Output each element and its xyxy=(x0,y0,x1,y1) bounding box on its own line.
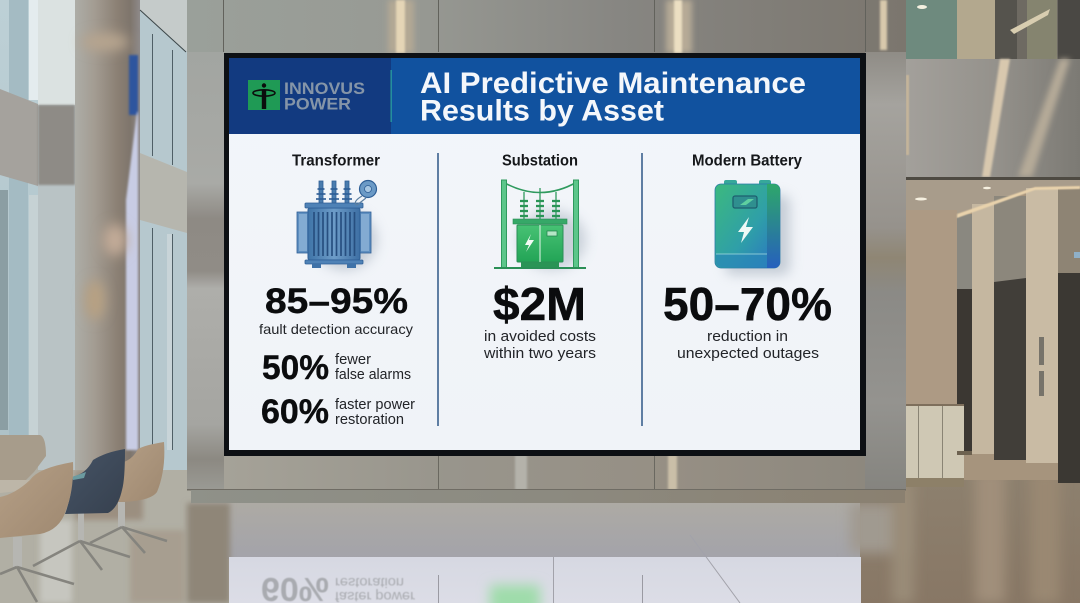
text: reduction in unexpected outages: reduction in xyxy=(707,329,788,345)
icon: substation xyxy=(494,180,586,270)
ceiling and elevators xyxy=(906,180,1080,487)
chair: navy xyxy=(33,449,130,570)
heading: Transformer: Transformer xyxy=(292,153,380,170)
title: Results by Asset xyxy=(420,94,664,128)
column divider left xyxy=(437,153,439,426)
stat: 60% faster power restoration: faster power xyxy=(335,397,415,413)
metal column xyxy=(75,0,140,470)
chair: rear tan xyxy=(90,442,167,553)
lounge chairs xyxy=(0,435,167,602)
stat: 50% fewer false alarms: fewer xyxy=(335,352,371,368)
heading: Substation: Substation xyxy=(502,153,578,170)
metal wall side pillars xyxy=(187,52,224,490)
logo wordmark: INNOVUS xyxy=(284,80,365,98)
logo wordmark: POWER xyxy=(284,95,351,113)
floor reflection of screen xyxy=(261,535,740,603)
stat: $2M: $2M xyxy=(493,278,586,330)
digital screen xyxy=(224,53,866,456)
text: in avoided costs within two years: in avoided costs xyxy=(484,329,596,345)
floor reflection of screen: restoration xyxy=(335,575,404,591)
column divider right xyxy=(641,153,643,426)
header divider xyxy=(390,70,392,122)
right-of-column windows xyxy=(140,0,187,470)
metal wall top xyxy=(187,0,906,53)
icon: transformer xyxy=(297,180,377,270)
stat: 50% fewer false alarms: false alarms xyxy=(335,367,411,383)
title xyxy=(420,67,806,128)
text: in avoided costs within two years xyxy=(483,329,596,362)
stat: 50% fewer false alarms xyxy=(262,349,411,387)
chair: front tan xyxy=(0,462,74,602)
text: in avoided costs within two years: within two years xyxy=(483,346,596,362)
title: AI Predictive Maintenance xyxy=(420,67,806,100)
text: reduction in unexpected outages: unexpected outages xyxy=(677,346,819,362)
logo wordmark xyxy=(284,80,365,113)
floor xyxy=(0,455,1080,603)
screen background xyxy=(229,58,860,450)
left column pale xyxy=(38,0,75,470)
logo icon xyxy=(248,80,280,110)
right upper glass xyxy=(906,0,1080,60)
panel: transformer xyxy=(259,153,415,431)
text: reduction in unexpected outages xyxy=(677,329,819,362)
icon: battery xyxy=(715,180,790,275)
heading: Modern Battery: Modern Battery xyxy=(692,153,802,170)
chair: far left sofa xyxy=(0,435,46,493)
panel: substation xyxy=(483,153,596,362)
far left windows xyxy=(0,0,38,440)
logo: Innovus Power xyxy=(248,80,365,113)
screen bezel xyxy=(224,53,866,456)
metal wall lower panel xyxy=(187,455,906,503)
stat: 60% faster power restoration xyxy=(261,393,415,431)
text: fault detection accuracy: fault detection accuracy xyxy=(259,321,413,337)
panel: modern battery xyxy=(663,153,832,362)
stat: 85–95%: 85–95% xyxy=(265,282,408,321)
stat: 60% faster power restoration: 60% xyxy=(261,393,329,431)
stat: 60% faster power restoration: restoration xyxy=(335,412,404,428)
header bar xyxy=(229,58,860,134)
metal band right xyxy=(906,59,1080,180)
stat: 50–70%: 50–70% xyxy=(663,278,832,330)
stat: 50% fewer false alarms: 50% xyxy=(262,349,329,387)
